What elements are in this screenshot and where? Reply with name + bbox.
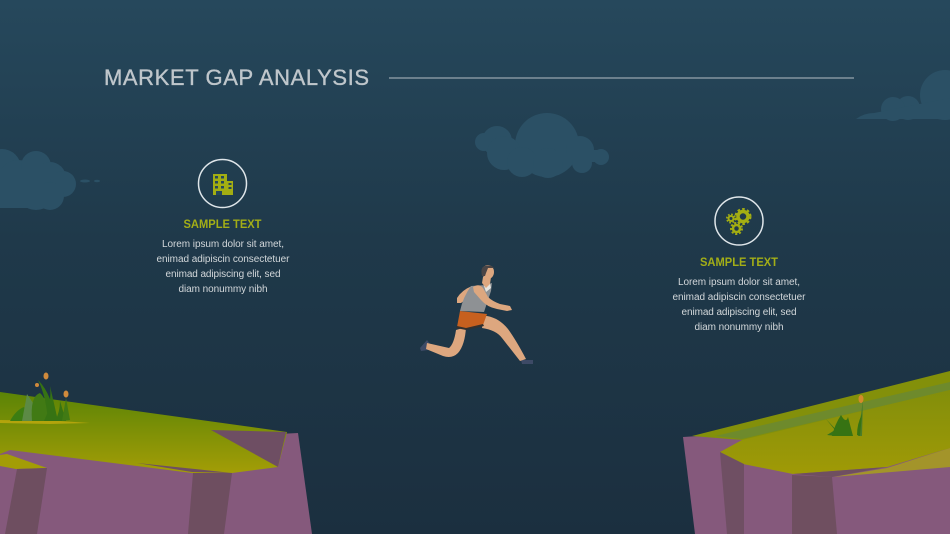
body text: enimad adipiscin consectetuer bbox=[156, 254, 290, 265]
rock bbox=[0, 433, 312, 534]
body text bbox=[156, 239, 290, 295]
shoes bbox=[420, 340, 533, 364]
icon: gears bbox=[715, 197, 763, 245]
title: MARKET GAP ANALYSIS bbox=[104, 65, 369, 90]
body text: Lorem ipsum dolor sit amet, bbox=[162, 239, 284, 250]
body text: Lorem ipsum dolor sit amet, bbox=[678, 277, 800, 288]
grass top bbox=[0, 392, 287, 473]
body text: enimad adipiscing elit, sed bbox=[166, 269, 280, 280]
front arm bbox=[473, 285, 512, 311]
body text: diam nonummy nibh bbox=[178, 284, 268, 295]
rock notch bbox=[211, 430, 286, 467]
plant bbox=[826, 395, 864, 436]
torso bbox=[460, 283, 492, 312]
rock ledge bbox=[683, 437, 742, 470]
yellow highlight bbox=[0, 420, 90, 424]
cloud: left bbox=[0, 149, 100, 210]
body text: diam nonummy nibh bbox=[694, 322, 784, 333]
grass lip bbox=[0, 454, 47, 469]
rock shadow columns bbox=[5, 468, 47, 534]
rock bbox=[683, 420, 950, 534]
heading: SAMPLE TEXT bbox=[184, 217, 262, 231]
body text: enimad adipiscin consectetuer bbox=[672, 292, 806, 303]
rock sliver bbox=[793, 467, 887, 477]
right cliff bbox=[683, 371, 950, 534]
grass front bbox=[720, 390, 950, 474]
rock shadow columns bbox=[720, 452, 744, 534]
grass band bbox=[715, 382, 950, 439]
cloud: top right bbox=[856, 70, 950, 121]
icon: buildings bbox=[198, 160, 246, 208]
front leg bbox=[482, 316, 526, 361]
tan ledge bbox=[833, 448, 950, 477]
rock sliver bbox=[137, 463, 232, 473]
plant bbox=[10, 372, 70, 421]
heading: SAMPLE TEXT bbox=[700, 255, 779, 269]
block: left sample text bbox=[156, 160, 290, 295]
head and neck bbox=[482, 277, 491, 288]
grass back bbox=[692, 371, 950, 450]
cloud: centre bbox=[475, 113, 609, 178]
collar bbox=[484, 283, 491, 292]
body text: enimad adipiscing elit, sed bbox=[682, 307, 796, 318]
block: right sample text bbox=[672, 197, 806, 333]
back arm bbox=[457, 286, 477, 303]
title rule bbox=[389, 78, 854, 79]
left cliff bbox=[0, 372, 312, 534]
shorts bbox=[457, 311, 487, 329]
back leg bbox=[426, 327, 466, 357]
running person bbox=[420, 265, 533, 364]
body text bbox=[672, 277, 806, 333]
hair bbox=[481, 265, 494, 276]
